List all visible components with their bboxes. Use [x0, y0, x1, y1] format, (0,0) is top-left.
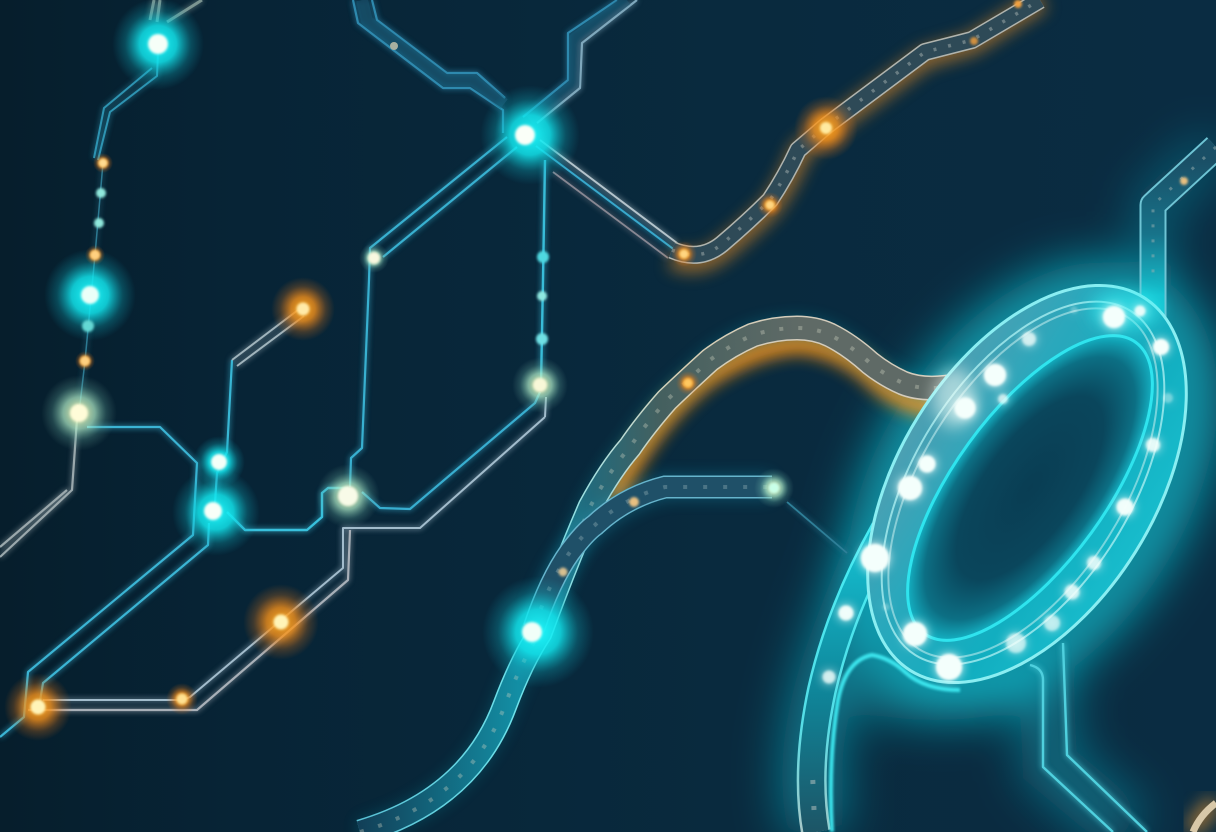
ring: inner branch where tail joins [831, 655, 960, 832]
trace: grey double line to left edge [0, 405, 78, 557]
trace: top-left grey stubs [150, 0, 202, 22]
trace: blue parallel line [39, 523, 209, 707]
trace: thin link into ring [787, 502, 847, 553]
ring: middle track lines [824, 254, 1216, 712]
band: right connector into ring [1153, 147, 1216, 335]
bottom right orange corner [1193, 803, 1216, 832]
ring: white highlight at orange join [933, 368, 977, 428]
orange glow under arc band [612, 343, 965, 500]
trace: vertical to orange node [215, 360, 232, 503]
trace: faint dotted column [79, 163, 103, 413]
trace: two lines under ring [1030, 643, 1147, 832]
trace: junction to upper right [523, 0, 617, 117]
trace: long vertical to junction [350, 137, 507, 487]
trace: centre to right rise [362, 392, 540, 509]
ring: large glowing oval [802, 230, 1216, 738]
band: blue track ending at small node [534, 487, 772, 628]
trace: junction to upper left [353, 0, 503, 133]
trace: top-left node down to dotted column [94, 52, 158, 160]
nodes: halos [4, 0, 858, 741]
band: tail below ring [812, 530, 885, 832]
trace: blue path from yellow node [0, 427, 197, 737]
wide teal glow around ring [811, 147, 1216, 832]
dot on upper-left band [390, 42, 398, 50]
trace: lower double line [43, 397, 546, 700]
ring: bright cyan highlight at top right [1090, 290, 1160, 330]
ring: white beads [822, 306, 1173, 684]
band: upper grey track with orange glow [672, 0, 1042, 262]
ring: dark centre hole [863, 298, 1197, 678]
trace: junction to vertical dots [541, 160, 545, 385]
band: long arc from bottom through cyan node to ring [360, 328, 960, 832]
trace: junction to track [540, 140, 677, 243]
trace: centre-left connector [227, 488, 348, 530]
